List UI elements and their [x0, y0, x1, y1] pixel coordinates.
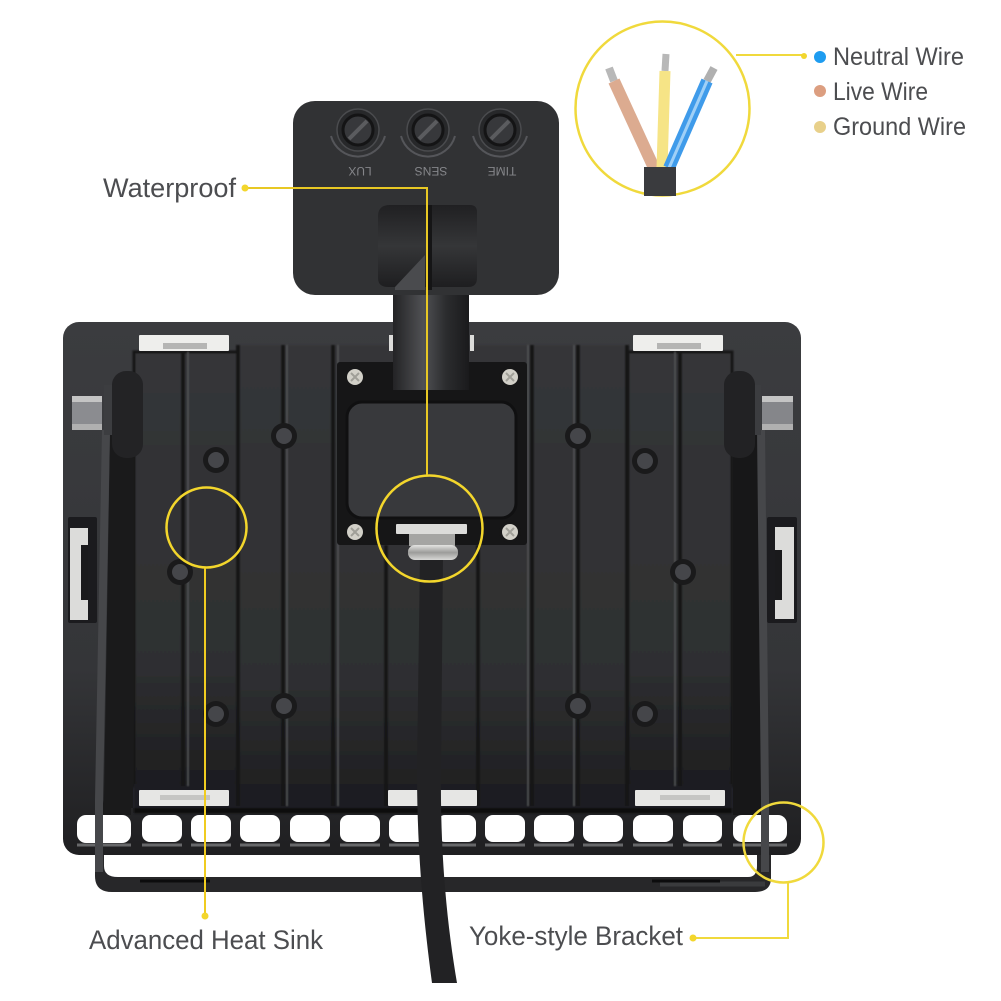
legend: live wire: Live Wire — [833, 78, 928, 106]
legend: ground wire: Ground Wire — [833, 113, 966, 141]
heat sink callout — [89, 488, 323, 955]
live wire — [609, 68, 654, 168]
label: advanced heat sink: Advanced Heat Sink — [89, 925, 323, 955]
ventilation slots — [77, 815, 787, 845]
heat sink screws — [167, 423, 696, 727]
sensor pivot joint — [378, 205, 477, 290]
cable gland nut — [396, 524, 467, 560]
bracket arms and pivot knobs — [72, 371, 793, 872]
TIME knob — [473, 109, 527, 157]
heat sink columns — [134, 345, 732, 814]
rear bracket yoke — [95, 850, 771, 892]
cable jacket — [644, 167, 676, 196]
legend: neutral wire: Neutral Wire — [833, 43, 964, 71]
sensor support stem — [393, 285, 469, 390]
housing body — [63, 322, 801, 855]
bracket callout — [469, 802, 824, 951]
wire callout leader — [736, 53, 807, 59]
knob label TIME: TIME — [488, 164, 516, 178]
ground wire — [662, 54, 666, 168]
junction box cover — [347, 402, 516, 518]
label: yoke-style bracket: Yoke-style Bracket — [469, 921, 683, 951]
power cable — [417, 555, 457, 983]
sensor head — [293, 101, 559, 295]
knob label SENS: SENS — [415, 164, 447, 178]
waterproof callout — [103, 173, 482, 582]
SENS knob — [401, 109, 455, 157]
LUX knob — [331, 109, 385, 157]
wire detail circle — [576, 22, 750, 196]
junction box mount plate — [337, 362, 527, 545]
neutral wire — [669, 68, 714, 168]
wire legend — [814, 43, 966, 141]
knob label LUX: LUX — [348, 164, 372, 178]
side glass clips — [68, 517, 797, 623]
label: waterproof: Waterproof — [103, 173, 236, 203]
top and bottom glass clips — [139, 335, 725, 806]
junction box screws — [344, 366, 521, 543]
